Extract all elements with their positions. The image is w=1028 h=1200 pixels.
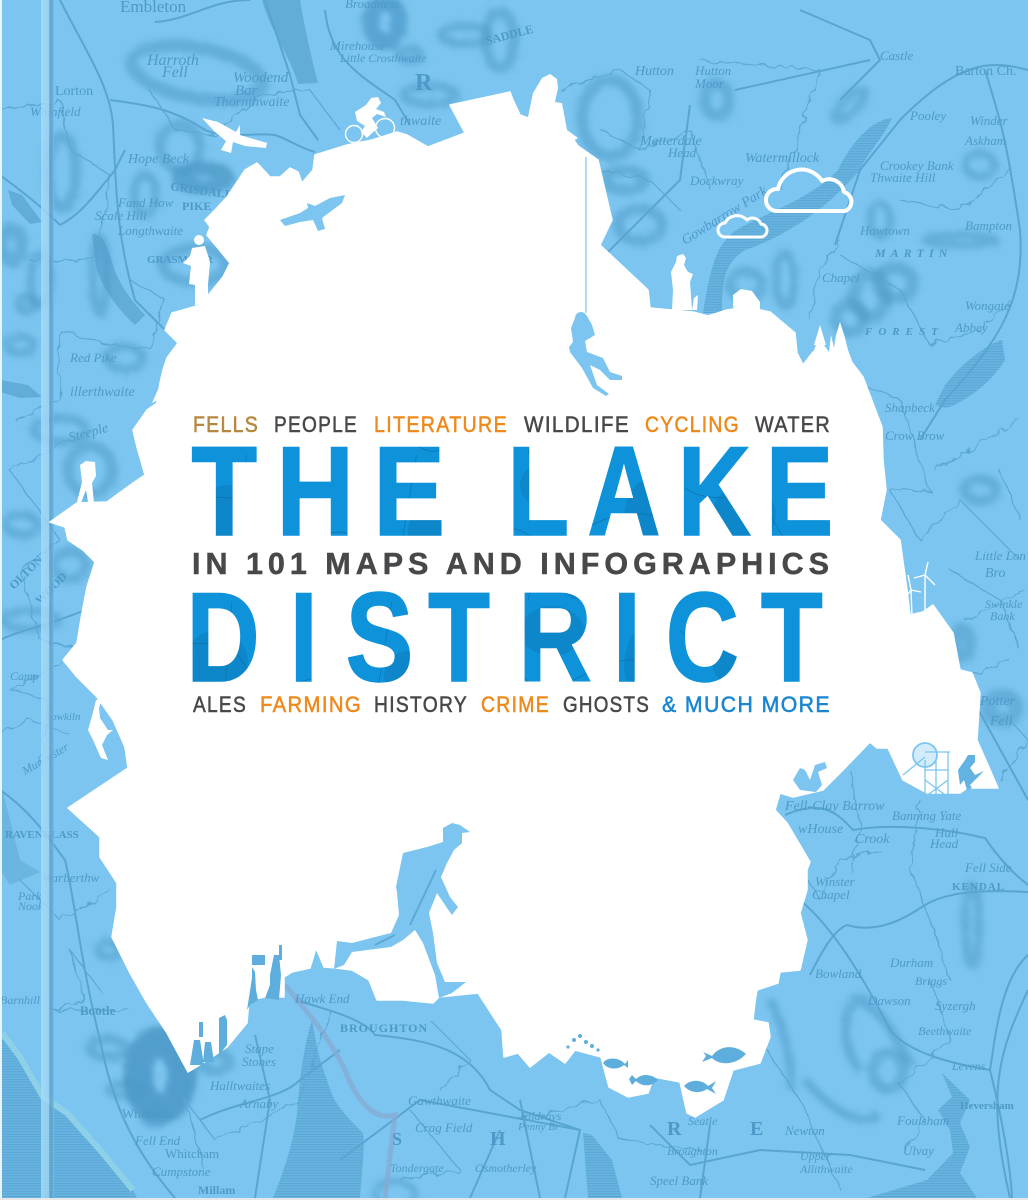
rope (585, 157, 587, 313)
map place names: Seatle (688, 1114, 718, 1128)
map place names: Crow Brow (885, 428, 945, 443)
map place names: Crook (855, 832, 890, 847)
map place names: WOOD (32, 569, 70, 607)
map place names: Whitbeck (122, 1106, 173, 1121)
icon: seated climber on summit (526, 74, 578, 146)
map place names: Levens (951, 1059, 986, 1073)
map place names: Durham (889, 955, 933, 970)
map place names: Bowland (815, 966, 862, 981)
map place names: Bootle (80, 1003, 116, 1018)
map place names: Fell (989, 714, 1013, 729)
map place names: Nook (17, 899, 44, 913)
map place names: Allithwaite (799, 1162, 853, 1176)
map place names: Warberthw (42, 870, 100, 885)
map place names: Bar (235, 83, 258, 99)
map place names: SADDLE (484, 22, 535, 48)
map place names: Crag Field (415, 1120, 473, 1135)
icon: guided walkers with signs (190, 945, 282, 1065)
category tags: top line (193, 412, 831, 437)
map place names: KENDAL (952, 881, 1005, 893)
map place names: Halltwaites (209, 1078, 270, 1093)
category tags: bottom line (193, 692, 831, 717)
icon: white eagle (202, 118, 267, 153)
map place names: Speel Bank (650, 1173, 708, 1188)
map place names: FOREST (864, 326, 944, 338)
map place names: Penny Br (517, 1121, 560, 1133)
map place names: Abbey (954, 320, 988, 335)
map place names: Castle (880, 48, 913, 63)
map place names: Hawk End (294, 991, 350, 1006)
map place names: Longthwaite (117, 223, 183, 238)
map place names: Howtown (859, 223, 910, 238)
map place names: Gawthwaite (408, 1093, 471, 1108)
icon: blue eagle (280, 195, 345, 231)
title: district: DISTRICT (186, 567, 823, 709)
icon: running walker (334, 823, 470, 998)
map place names: Tondergate (390, 1161, 444, 1175)
map place names: Beethwaite (918, 1024, 972, 1038)
map place names: Bro (985, 566, 1005, 581)
map place names: Swinkle (985, 597, 1023, 611)
map place names: Head (929, 836, 959, 851)
map place names: Harroth (146, 52, 199, 69)
category tags: top line: WATER (755, 412, 831, 437)
map place names: Park (17, 889, 42, 903)
map place names: Crookey Bank (880, 158, 954, 173)
map place names: Dawson (867, 993, 911, 1008)
map place names: Kildrays (519, 1109, 562, 1123)
map place names: Lorton (55, 84, 93, 99)
map place names: Dockwray (689, 173, 744, 188)
map place names: Stape (245, 1041, 274, 1056)
map place names: illerthwaite (70, 385, 135, 400)
map pale river (285, 985, 395, 1198)
map place names: Head (667, 145, 697, 160)
map place names: Barnhill (0, 993, 41, 1007)
map place names: Millam (198, 1183, 235, 1197)
map place names: Fell End (134, 1133, 181, 1148)
map place names: Stones (242, 1054, 276, 1069)
icon: colliery headframe (903, 743, 950, 797)
map place names: Askham (964, 133, 1006, 148)
map place names: Hutton (634, 64, 674, 79)
map place names: Lowkiln (44, 711, 81, 723)
map place names: PIKE (182, 199, 211, 213)
map place names: Winster (815, 874, 856, 889)
map place names: Fand How (117, 195, 174, 210)
map place names: Matterdale (639, 134, 702, 149)
map place names: R (667, 1118, 682, 1140)
white Lake District silhouette (50, 92, 998, 1117)
map place names: OLTON (6, 552, 46, 592)
map place names: Watermillock (745, 151, 820, 166)
icon: hiker with backpack (77, 461, 96, 503)
map place names: Whinfield (30, 104, 81, 119)
map place names: Thornthwaite (214, 95, 289, 110)
map place names: RAVENGLASS (5, 829, 79, 841)
category tags: bottom line: FARMING (260, 692, 362, 717)
map place names: Mirehouse (329, 38, 385, 53)
map place names: Syzergh (935, 998, 976, 1013)
map place names: Pooley (909, 108, 946, 123)
map place names: thwaite (400, 114, 441, 129)
map place names: Bank (990, 609, 1015, 623)
map place names: H (490, 1128, 506, 1150)
map place names: Potter (979, 694, 1016, 709)
map place names: Briggs (915, 974, 947, 988)
icon: miner with pick (958, 755, 984, 790)
icon: abseiling climber (569, 312, 622, 396)
map place names: Banning Yate (892, 808, 961, 823)
map place names: Steeple (67, 421, 110, 446)
map place names: GRISDALE (170, 179, 234, 202)
category tags: top line: CYCLING (645, 412, 740, 437)
map place names: Muncaster (19, 740, 71, 778)
icon: wind turbines (905, 562, 935, 617)
map place names: Camp (10, 669, 39, 683)
map place names: GRASMOOR (147, 254, 214, 266)
map place names: Little Lon (974, 548, 1026, 563)
map place names: Scale Hill (95, 208, 147, 223)
map place names: Upper (800, 1149, 831, 1163)
icon: pine trees (805, 322, 856, 372)
icon: scree blossoms (152, 385, 193, 403)
map place names: Foulsham (896, 1113, 949, 1128)
category tags: top line: LITERATURE (374, 412, 508, 437)
category tags: top line: FELLS (193, 412, 259, 437)
title: the lake: LAKE (507, 421, 833, 563)
map place names: BROUGHTON (340, 1021, 428, 1035)
icon: sheep (733, 289, 760, 310)
map place names: R (415, 70, 433, 96)
map place names: Bampton (965, 218, 1012, 233)
title: the lake: THE (191, 420, 445, 562)
map place names: Shapbeck (885, 400, 935, 415)
icon: walker on the west coast (183, 235, 210, 305)
map place names: Gowbarrow Park (679, 183, 771, 248)
map place names: Osmotherley (475, 1161, 537, 1175)
map place names: Chapel (812, 887, 850, 902)
category tags: bottom line: CRIME (481, 692, 550, 717)
book spine groove (41, 0, 54, 1200)
category tags: top line: WILDLIFE (524, 412, 630, 437)
category tags: bottom line: ALES (193, 692, 247, 717)
map place names: Moor (694, 76, 725, 91)
map place names: Hull (934, 825, 958, 840)
icon: coastal flowers (566, 1034, 600, 1052)
map place names: Barton Ch. (955, 64, 1016, 79)
icon: squirrel (793, 762, 827, 792)
map place names: Fell Side (964, 860, 1012, 875)
category tags: bottom line: GHOSTS (563, 692, 650, 717)
map place names: Chapel (822, 270, 860, 285)
map place names: S (392, 1129, 402, 1149)
map place names: Thwaite Hill (870, 170, 936, 185)
map place names: Red Pike (69, 350, 117, 365)
map place names: Heversham (960, 1100, 1014, 1112)
icon: clouds (718, 170, 851, 237)
map place names: Fell-Clay Barrow (784, 799, 885, 814)
map place names: Ulvay (903, 1143, 934, 1158)
category tags: top line: PEOPLE (274, 412, 358, 437)
map place names: wHouse (798, 822, 843, 837)
icon: rock climber (88, 699, 113, 760)
icon: hiker with camera tripod (671, 254, 698, 310)
map place names: Fell (161, 64, 188, 81)
map place names: Winder (970, 113, 1008, 128)
map place names: MARTIN (874, 246, 952, 260)
map place names: Little Crosthwaite (339, 51, 427, 65)
icon: cyclist (346, 97, 394, 142)
map place names: Whitcham (165, 1146, 219, 1161)
category tags: bottom line: HISTORY (374, 692, 468, 717)
map place names: Broughton (667, 1144, 718, 1158)
title: the lake (191, 420, 833, 563)
map place names: Hutton (694, 63, 731, 78)
map place names: Arnaby (239, 1096, 278, 1111)
icon: fish (603, 1047, 746, 1094)
map place names: Newton (784, 1123, 825, 1138)
map place names: Woodend (233, 70, 289, 86)
map place names: Cumpstone (152, 1164, 211, 1179)
map place names: Hope Beck (127, 152, 190, 167)
category tags: bottom line: & MUCH MORE (662, 692, 831, 717)
map place names: E (750, 1118, 763, 1140)
map place names: Wongate (965, 298, 1010, 313)
subtitle: IN 101 MAPS AND INFOGRAPHICS (192, 547, 829, 581)
